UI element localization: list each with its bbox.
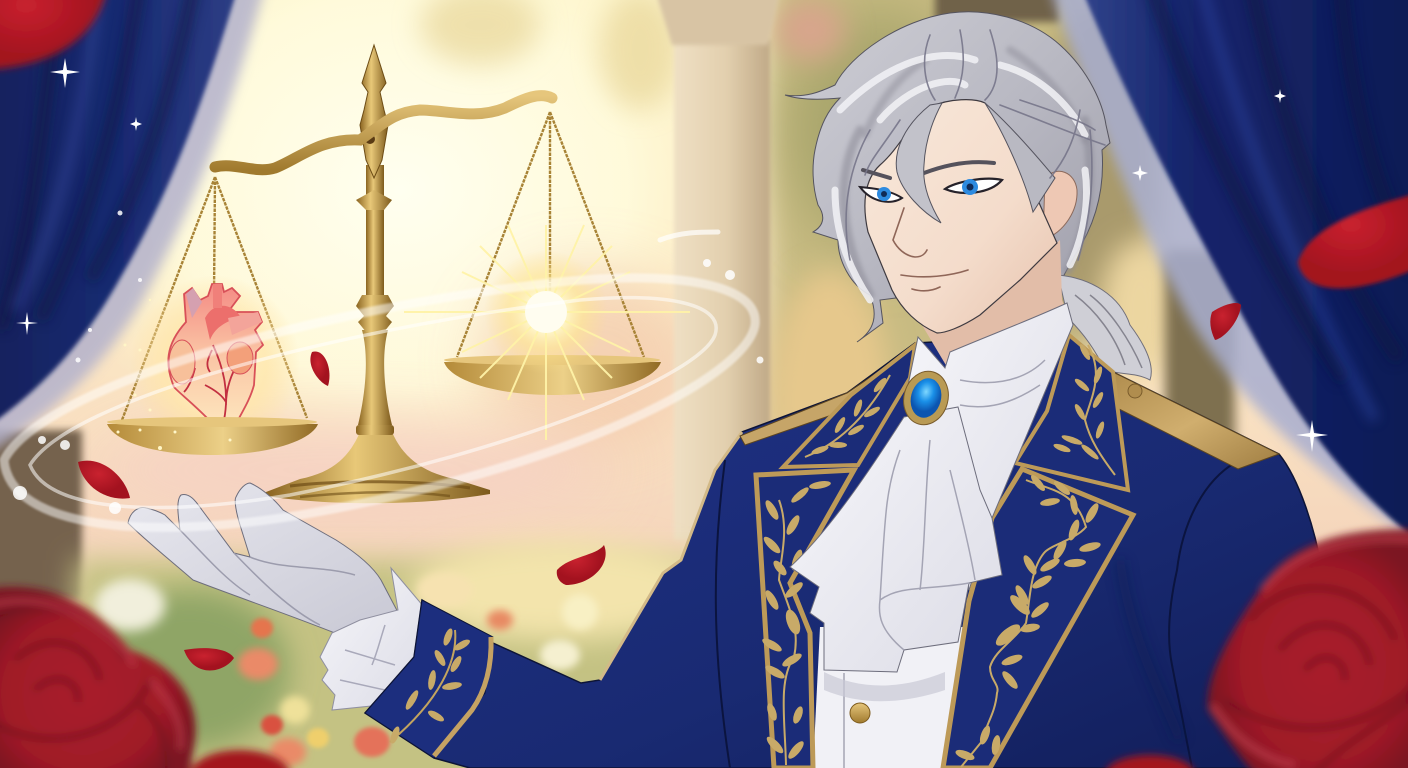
man: back hair and ponytail — [785, 12, 1151, 380]
nose and smile — [893, 208, 968, 291]
cravat main tail — [790, 407, 1002, 672]
man: blue coat — [365, 335, 1322, 768]
gold epaulette — [1113, 372, 1279, 469]
right eye — [945, 179, 1002, 195]
stone column — [655, 0, 780, 540]
left upper collar — [783, 345, 915, 467]
left eye — [860, 187, 902, 202]
left curtain — [0, 0, 272, 470]
cravat collar and upper folds — [905, 303, 1073, 590]
scale pillar — [356, 45, 394, 435]
neck — [922, 240, 1072, 372]
golden balance scale — [107, 45, 690, 503]
left pan — [107, 299, 318, 455]
ponytail — [1058, 275, 1151, 380]
scale beam — [215, 96, 552, 170]
eyebrows — [863, 162, 994, 178]
sapphire brooch — [898, 366, 954, 430]
lower-right lapel with gold vines — [943, 469, 1133, 768]
man: front hair locks — [835, 30, 1105, 300]
heart glow — [130, 275, 300, 455]
left shoulder gold strip — [740, 358, 905, 445]
swirling white ribbon — [4, 232, 755, 527]
flower garden — [75, 540, 755, 768]
right curtain — [1040, 0, 1408, 565]
shirt cuff ruffle — [320, 568, 424, 710]
white shirt and button — [813, 627, 965, 768]
lower-left lapel with gold vines — [756, 470, 854, 768]
man: face — [860, 100, 1057, 333]
foreground rose: bottom right — [1105, 529, 1408, 768]
man: ear — [1043, 171, 1077, 240]
scale base — [266, 432, 490, 503]
left pan chains — [122, 177, 307, 420]
coat cuff — [365, 600, 493, 758]
anatomical heart — [168, 284, 263, 422]
right pan chains — [457, 112, 644, 357]
white cravat — [790, 303, 1073, 672]
right pan — [444, 355, 661, 395]
white gloved hand — [128, 483, 424, 710]
foreground rose: bottom left — [0, 587, 290, 768]
radiant light orb — [404, 225, 690, 440]
floating sparkle dots — [13, 210, 764, 514]
twinkling star sparkles — [16, 58, 1328, 452]
right upper collar — [1015, 335, 1128, 490]
